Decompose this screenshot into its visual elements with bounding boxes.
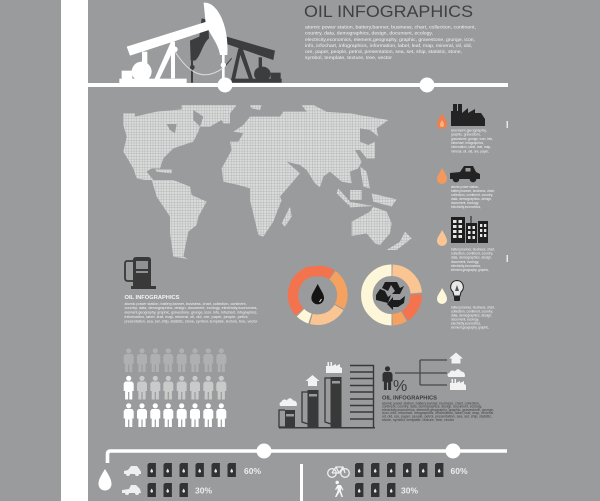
fuel cans (148, 463, 236, 477)
percent label: 60% (450, 467, 468, 476)
bottom right row: bicycle 60% (328, 463, 468, 477)
text: battery,banner, business, chart, (451, 246, 495, 251)
icon: pickup (122, 485, 141, 495)
icon: fuel pump (125, 257, 156, 289)
white pumpjack (119, 3, 228, 83)
icon: walker (335, 481, 344, 497)
intro text block: info, infochart, infographics, information, label, leaf, map, mineral, oil, old, (305, 43, 472, 48)
text: gravestone, grunge, icon, info, (451, 136, 493, 141)
icon: bicycle (328, 467, 349, 477)
text: element,geography, (451, 128, 487, 132)
text: data, demographics, design, (451, 196, 492, 201)
percent sign: % (393, 378, 407, 395)
text: atomic power station, (451, 184, 479, 189)
text: mineral, oil, old, ore, paper, (451, 148, 489, 153)
icon: buildings (451, 216, 488, 243)
side column: buildings item (437, 216, 495, 272)
body: icon, info, infochart, infographics, information, label, leaf, map, mineral, (382, 411, 494, 415)
text: electricity,economics, (451, 204, 481, 209)
bar chart: fuel cylinders and tower (279, 362, 375, 428)
pump text block (124, 295, 258, 324)
dark text block (382, 396, 494, 422)
row: middle (124, 376, 226, 400)
text: battery,banner, business, chart, (451, 304, 495, 309)
donut chart: oil drop (293, 271, 342, 320)
body: oil, old, ore, paper, people, petrol, presentation, sea, set, ship, statistic, (382, 414, 492, 418)
icon: recycling arrows (376, 282, 405, 310)
heading: OIL INFOGRAPHICS (124, 295, 180, 301)
text: graphic, gravestone, (451, 132, 481, 136)
body: atomic power station, battery,banner, business, chart, collection, (382, 401, 480, 405)
fuel cans (355, 483, 395, 497)
icon: white drop (98, 469, 112, 490)
icon: drop (437, 288, 447, 304)
text: data, demographics, design, (451, 254, 492, 259)
title: OIL INFOGRAPHICS (304, 2, 473, 21)
body (124, 301, 258, 324)
intro text block: atomic power station, battery,banner, business, chart, collection, continent, (305, 25, 476, 30)
body: presentation, sea, set, ship, statistic, stone, symbol, template, texture, tree, vector (124, 319, 258, 324)
percent label: 30% (401, 486, 418, 496)
body: continent, country, data, demographics, design, document, ecology, (382, 405, 482, 409)
pictogram: people grid (124, 348, 226, 427)
icon: drop (437, 230, 447, 246)
icon: house (449, 352, 463, 364)
fuel cans (148, 483, 188, 497)
white vertical band (61, 0, 88, 501)
donut chart: recycling (367, 270, 416, 320)
text: electricity,economics, (451, 320, 481, 325)
body (382, 401, 494, 422)
body: atomic power station, battery,banner, business, chart, collection, continent, (124, 301, 246, 306)
bar 1 (279, 410, 295, 428)
body: country, data, demographics, design, document, ecology, electricity,economics, (124, 305, 258, 310)
bottom left row: truck 30% (122, 483, 212, 497)
person percent diagram (382, 352, 466, 395)
percent label: 60% (244, 467, 261, 476)
vertical divider (300, 464, 303, 501)
text: element,geography, graphic, (451, 324, 489, 329)
body: element,geography, graphic, gravestone, grunge, icon, info, infochart, infographics, (124, 310, 258, 315)
icon: house (306, 375, 320, 386)
axis (279, 427, 375, 428)
icon: factory (451, 104, 485, 126)
icon: factory (450, 379, 466, 390)
body: stone, symbol, template, texture, tree, vector (382, 418, 455, 422)
pumpjack illustration (119, 3, 282, 83)
text: element,geography, graphic, (451, 267, 489, 272)
intro text block: symbol, template, texture, tree, vector (305, 55, 393, 60)
icon: flame (437, 113, 447, 129)
text (451, 304, 495, 329)
side column: factory item (437, 104, 493, 153)
icon: cloud (280, 398, 297, 406)
text: information, label, leaf, map, (451, 144, 491, 149)
icon: factory (326, 362, 342, 373)
text: collection, continent, country, (451, 250, 493, 255)
icon: person (382, 366, 392, 390)
tick mark (506, 255, 508, 262)
bottom right row: walker 30% (335, 481, 418, 497)
intro text block: electricity,economics, element,geography, graphic, gravestone, grunge, icon, (305, 37, 475, 42)
dotted world map (123, 105, 412, 259)
icon: cloud (448, 369, 465, 377)
side column: truck item (437, 166, 495, 209)
text: document, ecology, (451, 316, 479, 321)
bottom timeline (108, 444, 507, 463)
intro text block: ore, paper, people, petrol, presentation, sea, set, ship, statistic, stone, (305, 49, 462, 54)
percent label: 30% (195, 486, 212, 496)
icon: oil drop (311, 284, 324, 304)
top timeline (88, 78, 508, 92)
text (451, 246, 495, 272)
fuel cans (355, 463, 443, 477)
text: collection, continent, country, (451, 192, 493, 197)
icon: car (124, 466, 141, 476)
text: collection, continent, country, (451, 308, 493, 313)
text (451, 184, 495, 209)
icon: flame (437, 168, 447, 184)
row: bottom (124, 403, 226, 427)
intro text block: country, data, demographics, design, document, ecology, (305, 31, 433, 36)
text: document, ecology, (451, 259, 479, 264)
text (451, 128, 493, 153)
body: information, label, leaf, map, mineral, oil, old, ore, paper, people, petrol, (124, 314, 248, 319)
text: document, ecology, (451, 200, 479, 205)
bar 2 (302, 390, 318, 428)
bar 3 (325, 377, 342, 428)
row: top (124, 348, 226, 372)
text: electricity,economics, (451, 263, 481, 268)
heading: OIL INFOGRAPHICS (382, 396, 437, 402)
text: data, demographics, design, (451, 312, 492, 317)
striped tower (350, 365, 374, 428)
intro text block (305, 25, 476, 60)
bottom left row: car 60% (124, 463, 261, 477)
body: electricity,economics, element,geography, graphic, gravestone, grunge, (382, 408, 494, 412)
branching lines (395, 360, 447, 385)
tick mark (506, 121, 508, 128)
text: battery,banner, business, chart, (451, 188, 495, 193)
text: infochart, infographics, (451, 140, 484, 145)
icon: light bulb (451, 280, 463, 301)
side column: bulb item (437, 280, 495, 329)
icon: truck (450, 166, 480, 182)
dark pumpjack (190, 18, 282, 83)
